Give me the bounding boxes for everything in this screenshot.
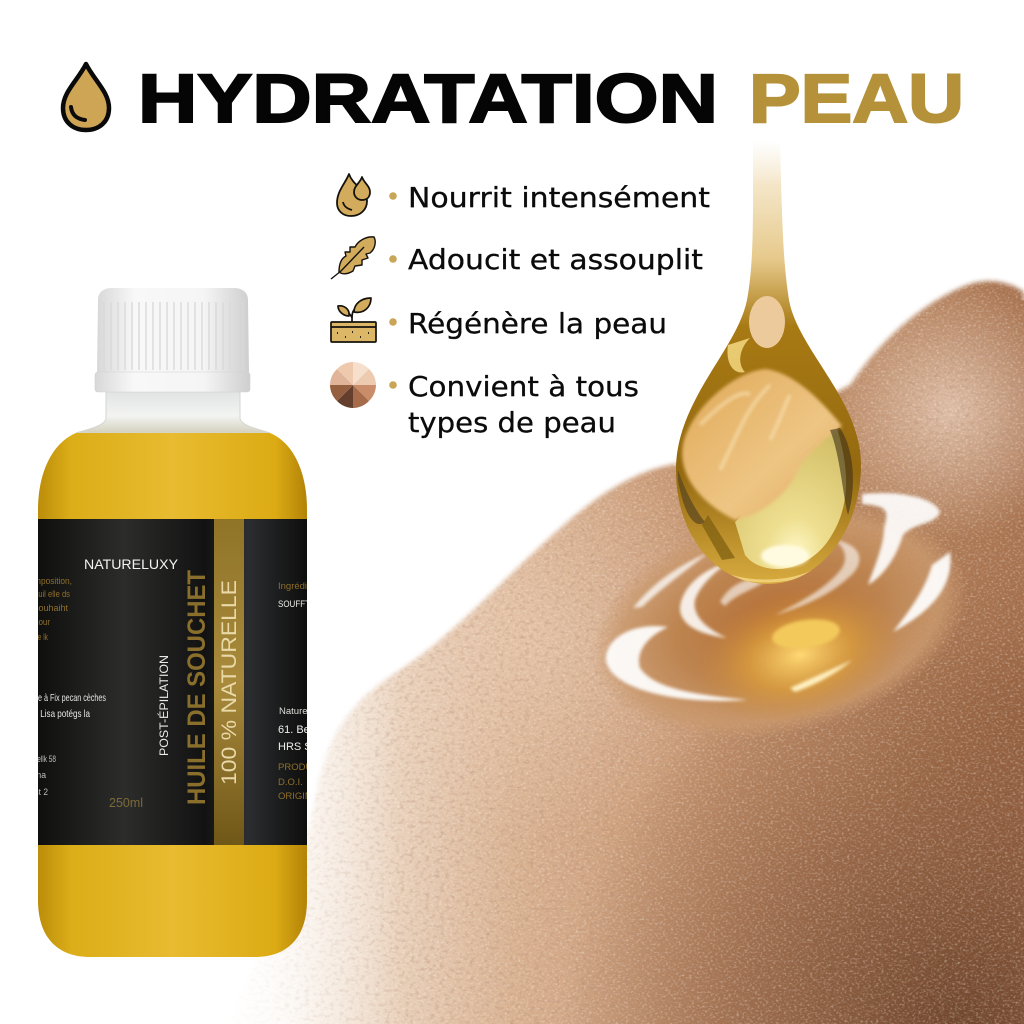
benefit text: Régénère la peau [408, 307, 667, 340]
benefit text: Convient à tous [408, 370, 639, 403]
benefit: all skin types [330, 362, 639, 439]
icon: two drops [337, 174, 370, 216]
reflection in drop: dark edges [678, 470, 705, 524]
label right side small print: SOUFFT [278, 599, 310, 610]
bottle cap [95, 288, 250, 392]
product bottle [38, 288, 307, 957]
icon: title oil drop [63, 64, 109, 130]
oil pool on skin [567, 467, 993, 777]
benefits list [330, 174, 710, 439]
label volume: 250ml [109, 796, 143, 810]
label right side small print: ORIGINE [278, 791, 318, 802]
label left side small print: ma [34, 770, 46, 780]
label right side small print [278, 582, 307, 799]
label right side small print: PRODUIT [278, 762, 321, 773]
bullet [389, 192, 397, 200]
benefit: regenerates [331, 298, 667, 342]
oil ripples: white highlights [606, 493, 951, 701]
benefit: softens [331, 237, 703, 279]
label left side small print: de lk [34, 632, 48, 642]
benefit text: Nourrit intensément [408, 181, 710, 214]
benefit text: Adoucit et assouplit [408, 243, 703, 276]
bottle body with oil [38, 433, 307, 957]
label right side small print: HRS S7 [278, 741, 318, 753]
label left side small print: de à Fix pecan cèches [34, 692, 106, 704]
bullet [389, 381, 397, 389]
title word: peau: PEAU [749, 60, 964, 137]
label left side small print: souhaiht [34, 603, 68, 613]
benefit: nourishes [337, 174, 710, 216]
bullet [389, 318, 397, 326]
oil drop with stream [676, 140, 861, 584]
bottle neck [76, 390, 270, 433]
bullet [389, 255, 397, 263]
label brand: NATURELUXY [84, 556, 179, 572]
title word: hydratation: HYDRATATION [138, 60, 718, 137]
label left side small print: pour [34, 617, 50, 627]
label left side small print: cellk 58 [34, 754, 56, 764]
label left side small print: mposition, [34, 576, 72, 586]
icon: sprout in soil [331, 298, 376, 342]
label subtitle: POST-ÉPILATION [158, 655, 171, 756]
benefit text: types de peau [408, 406, 616, 439]
label right side small print: Naturelux [279, 706, 320, 717]
bottle label [38, 519, 307, 845]
label right side small print: Ingrédients [278, 581, 325, 592]
reflection in drop: lens [735, 425, 846, 569]
icon: skin tone wheel [330, 362, 376, 408]
reflection in drop: skin [682, 369, 842, 520]
label right side small print: D.O.I. [278, 777, 303, 788]
icon: feather [331, 237, 375, 279]
label left side small print: huil elle ds [34, 589, 70, 599]
label gold stripe [214, 519, 244, 845]
photo: skin surface [200, 270, 1024, 1024]
label left side small print: nt 2 [34, 787, 48, 797]
label claim: 100 % NATURELLE [218, 580, 241, 785]
label left side small print [34, 576, 106, 797]
label right side small print: 61. Belgique [278, 724, 339, 736]
label product name: HUILE DE SOUCHET [183, 570, 211, 805]
benefit text [408, 370, 639, 439]
label left side small print: Il Lisa potégs la [34, 708, 90, 720]
title [63, 60, 964, 137]
